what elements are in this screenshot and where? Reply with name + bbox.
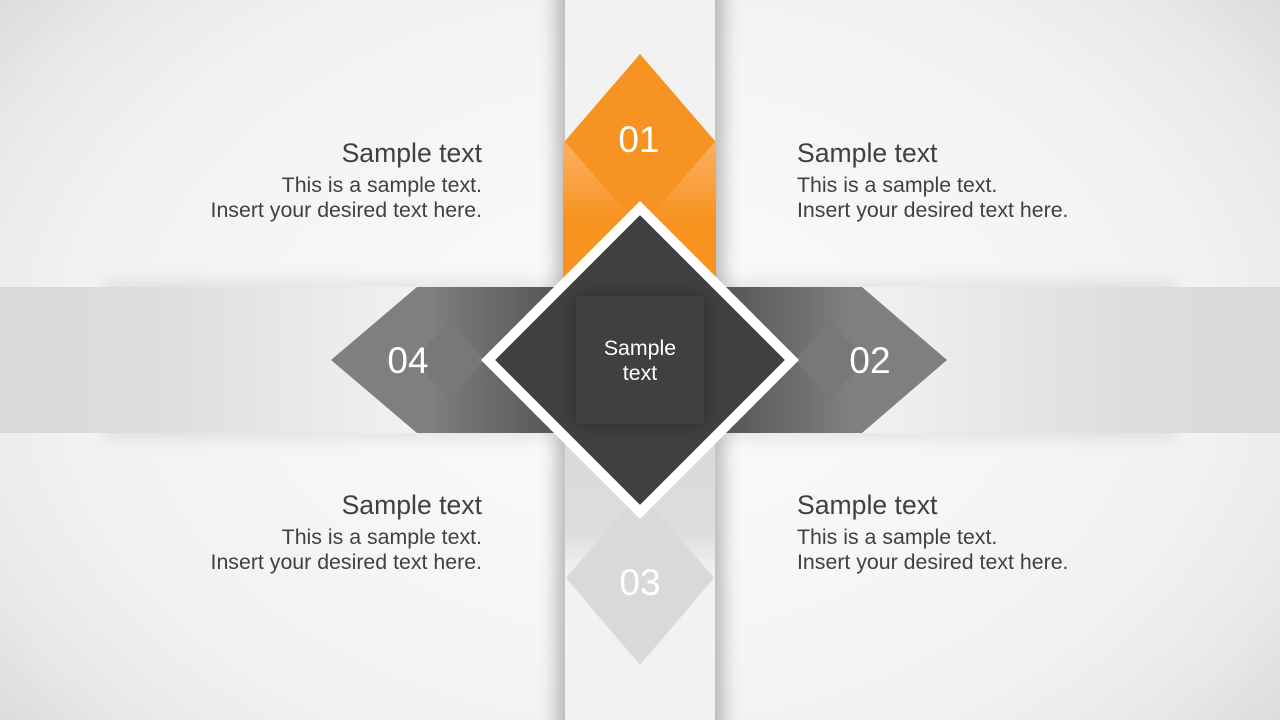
number 03: 03 [619, 562, 661, 603]
center diamond: text [623, 361, 657, 385]
text block: bottom right: This is a sample text. [797, 525, 997, 549]
text block: top left [211, 138, 483, 222]
center square [576, 296, 704, 424]
number 02: 02 [849, 340, 891, 381]
center diamond [481, 201, 799, 519]
text block: top left: Insert your desired text here. [211, 198, 482, 222]
text block: bottom left [211, 490, 483, 574]
text block: bottom right: Sample text [797, 490, 938, 520]
center label: Sample [604, 336, 676, 360]
segment 01: orange ribbon and diamond [563, 54, 716, 280]
text block: bottom right [797, 490, 1068, 574]
horizontal band [0, 281, 1280, 439]
segment 04: gray arrow left [331, 287, 560, 433]
text block: bottom left: This is a sample text. [282, 525, 482, 549]
text block: top left: This is a sample text. [282, 173, 482, 197]
text block: top right: Insert your desired text here. [797, 198, 1068, 222]
text block: top right [797, 138, 1068, 222]
number 01: 01 [618, 119, 660, 160]
vertical band [557, 0, 723, 720]
number 04: 04 [387, 340, 429, 381]
segment 02: gray arrow right [720, 287, 947, 433]
text block: top right: Sample text [797, 138, 938, 168]
text block: top right: This is a sample text. [797, 173, 997, 197]
dark diamond [495, 215, 785, 505]
segment 03: light gray ribbon and diamond [565, 433, 715, 665]
text block: top left: Sample text [342, 138, 483, 168]
text block: bottom right: Insert your desired text here. [797, 550, 1068, 574]
text block: bottom left: Insert your desired text here. [211, 550, 482, 574]
text block: bottom left: Sample text [342, 490, 483, 520]
white frame [481, 201, 799, 519]
